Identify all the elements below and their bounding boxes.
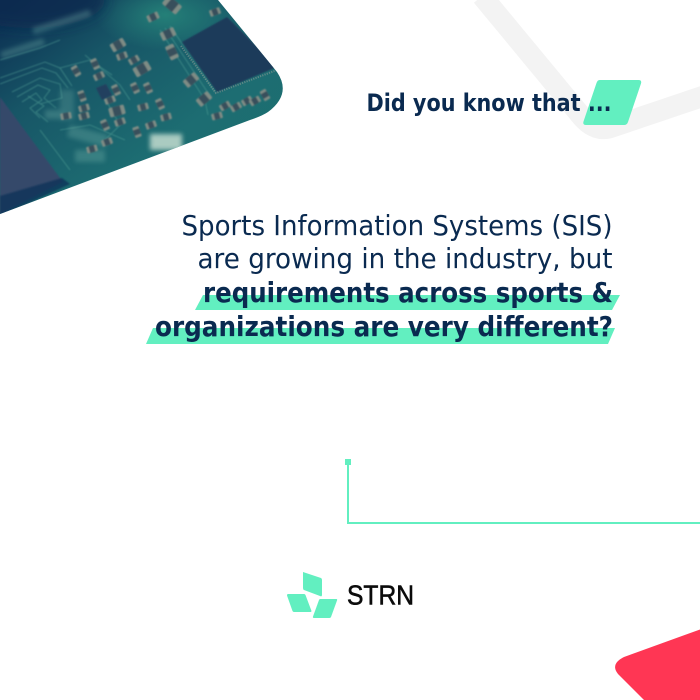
logo wordmark: STRN: [347, 580, 414, 610]
bright blurred highlight: [150, 134, 182, 150]
heading: did you know that: [366, 80, 641, 125]
out-of-focus left block: [0, 97, 63, 214]
large chip: [182, 17, 277, 92]
heading text: Did you know that ...: [366, 89, 612, 117]
body text: [155, 209, 613, 343]
logo mark: [287, 572, 337, 618]
component pieces: [60, 0, 271, 154]
dark lower edge: [0, 178, 70, 216]
highlight bar: line 3: [195, 295, 620, 310]
small dark chip: [96, 84, 112, 100]
connector line: [345, 459, 700, 523]
body text: requirements across sports &: [203, 276, 613, 309]
logo: STRN: [287, 572, 414, 618]
highlight bar: line 4: [146, 328, 615, 344]
body text: Sports Information Systems (SIS): [182, 209, 612, 242]
photo: circuit board: [0, 0, 300, 220]
body text: organizations are very different?: [155, 310, 613, 343]
decorative red shape: [615, 628, 700, 700]
green tag behind ellipsis: [583, 80, 641, 125]
decorative grey angled stripe: [482, 0, 700, 129]
body text: are growing in the industry, but: [198, 242, 613, 275]
